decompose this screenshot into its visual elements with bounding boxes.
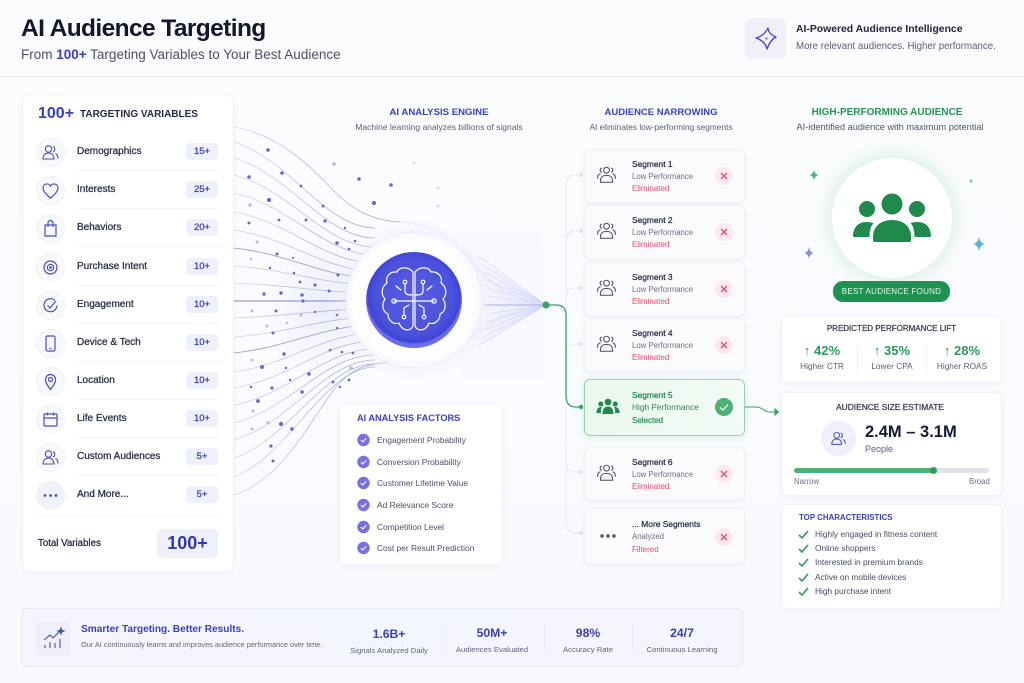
bottom summary bar [21,608,743,667]
factor: cost per result prediction [357,542,474,554]
row: and more: 5+ [197,489,207,500]
AI brain core [332,218,496,382]
stat: signals analyzed [350,627,428,655]
factor: conversion probability [357,456,461,468]
segment card: more segments: ... More Segments [632,519,700,529]
sparkles [804,170,984,259]
characteristic 5: High purchase intent [815,586,891,596]
row: purchase intent: Purchase Intent [77,261,147,272]
icon: people [821,421,856,456]
stat: higher CTR: Higher CTR [800,361,844,371]
segment card: more segments: Analyzed [632,532,664,541]
lift heading: PREDICTED PERFORMANCE LIFT [827,324,956,333]
characteristic 4: Active on mobile devices [815,572,906,582]
segment card 3 [584,262,745,316]
stat: audiences evaluated: 50M+ [477,626,507,640]
stat: lower CPA: ↑ 35% [874,343,910,358]
segment card 5: selected: High Performance [632,402,699,412]
segment card 4: Low Performance [632,341,693,350]
arrow: selected segment to results [745,407,778,415]
segment card 5: selected: Selected [632,416,663,425]
range labels: Narrow [794,477,819,486]
segment card 2: Low Performance [632,228,693,237]
panel heading [38,105,198,122]
row: interests: 25+ [194,184,210,195]
factor: ad relevance score [357,498,453,512]
factor: conversion probability: Conversion Probability [377,457,461,467]
characteristics heading: TOP CHARACTERISTICS [799,513,893,522]
factor: customer lifetime value: Customer Lifetime Value [377,478,468,488]
panel: audience size estimate: Broad [969,477,990,486]
panel heading: 100+ [38,105,74,122]
summary heading: Smarter Targeting. Better Results. [81,624,244,635]
stat: lower CPA [871,343,913,371]
segment card 1: Low Performance [632,172,693,181]
row: custom audiences: 5+ [197,451,207,462]
callout text: More relevant audiences. Higher performance. [796,41,996,52]
column heading: audience narrowing: AUDIENCE NARROWING [605,107,717,118]
size unit: People [865,444,893,454]
column heading: audience narrowing [590,107,732,132]
segment card 5: selected: Segment 5 [632,390,673,400]
segment card 6: Eliminated [632,482,669,491]
badge: best audience found [833,281,950,302]
row: and more: And More... [77,489,129,500]
stat: lower CPA: Lower CPA [871,361,913,371]
summary text: Our AI continuously learns and improves audience performance over time. [81,640,322,649]
total value: 100+ [167,533,208,553]
row: behaviors: 20+ [194,222,210,233]
row: location [23,362,234,400]
factor: engagement probability [357,434,466,446]
stat: signals analyzed: 1.6B+ [373,627,405,641]
factor: customer lifetime value [357,476,468,490]
factor: competition level [357,520,444,534]
row: custom audiences [23,438,234,476]
stat: higher ROAS: Higher ROAS [937,361,987,371]
characteristic 3: Interested in premium brands [815,557,923,567]
icon: brain [382,268,446,330]
factor: ad relevance score: Ad Relevance Score [377,500,453,510]
icon: sparkle badge [745,18,786,59]
row: purchase intent: 10+ [194,261,210,272]
stat: continuous learning: 24/7 [670,626,694,640]
panel heading: TARGETING VARIABLES [80,109,198,120]
factors heading: AI ANALYSIS FACTORS [357,413,460,423]
characteristic 2: Online shoppers [815,543,875,553]
stat: continuous learning [646,626,717,654]
header [0,0,1024,77]
characteristic 1: Highly engaged in fitness content [815,529,937,539]
factor: competition level: Competition Level [377,522,444,532]
title: AI Audience Targeting [21,15,266,42]
row: behaviors [23,209,234,247]
segment card 6: Low Performance [632,470,693,479]
icon: audience group [853,194,931,242]
total value [157,529,218,558]
segment card 4: Segment 4 [632,328,673,338]
panel: predicted performance lift [781,316,1002,383]
factor: cost per result prediction: Cost per Result Prediction [377,543,474,553]
segment card 3: Low Performance [632,285,693,294]
row: life events [23,400,234,438]
panel: targeting variables [22,94,234,572]
row: device and tech [23,324,234,362]
row: life events: Life Events [77,413,126,424]
segment card: more segments: Filtered [632,545,659,554]
column heading: high-performing audience: AI-identified audience with maximum potential [797,122,983,132]
column heading: AI analysis engine: AI ANALYSIS ENGINE [390,107,488,118]
stat: accuracy rate: Accuracy Rate [563,645,613,654]
range slider [794,468,989,473]
stat: higher ROAS [937,343,987,371]
row: demographics: 15+ [194,146,210,157]
column heading: AI analysis engine [355,107,523,132]
data particles [247,148,393,462]
row: location: 10+ [194,375,210,386]
icon: growth chart [36,621,70,655]
row: interests: Interests [77,184,115,195]
stat: continuous learning: Continuous Learning [647,645,717,654]
row: engagement [23,286,234,324]
segment card: more segments [584,508,745,564]
row: life events: 10+ [194,413,210,424]
segment card 6: Segment 6 [632,457,673,467]
stat: audiences evaluated [456,626,528,654]
segment card 1: Segment 1 [632,159,673,169]
callout heading: AI-Powered Audience Intelligence [796,24,962,35]
panel: top characteristics [781,504,1002,609]
stat: audiences evaluated: Audiences Evaluated [456,645,528,654]
row: engagement: 10+ [194,299,210,310]
segment card 5: selected [584,379,745,436]
stat: higher CTR: ↑ 42% [804,343,840,358]
badge: best audience found: BEST AUDIENCE FOUND [842,287,941,296]
column heading: audience narrowing: AI eliminates low-performing segments [590,122,732,132]
size value: 2.4M – 3.1M [865,423,957,441]
row: engagement: Engagement [77,299,134,310]
stat: accuracy rate [563,626,613,654]
stat: accuracy rate: 98% [576,626,600,640]
row: location: Location [77,375,115,386]
row: demographics [23,133,234,171]
column heading: high-performing audience [796,107,983,132]
stat: signals analyzed: Signals Analyzed Daily [350,646,428,655]
row: device and tech: 10+ [194,337,210,348]
segment card 6 [584,447,745,500]
segment card 4 [584,318,745,372]
column heading: high-performing audience: HIGH-PERFORMING AUDIENCE [812,107,962,118]
factor: engagement probability: Engagement Probability [377,435,466,445]
row: and more [23,476,234,514]
segment card 2 [584,205,745,259]
segment card 2: Segment 2 [632,215,673,225]
row: purchase intent [23,248,234,286]
stat: higher CTR [800,343,844,371]
stat: higher ROAS: ↑ 28% [944,343,980,358]
column heading: AI analysis engine: Machine learning analyzes billions of signals [355,122,523,132]
size heading: AUDIENCE SIZE ESTIMATE [836,402,944,412]
row: custom audiences: Custom Audiences [77,451,160,462]
segment card 1 [584,149,745,203]
segment card 1: Eliminated [632,184,669,193]
best audience circle [832,158,952,278]
segment card 3: Segment 3 [632,272,673,282]
panel: AI analysis factors [339,404,503,565]
panel: audience size estimate [781,392,1002,496]
segment card 2: Eliminated [632,240,669,249]
subtitle: From 100+ Targeting Variables to Your Best Audience [21,47,341,62]
signal lines [234,127,400,495]
row: interests [23,171,234,209]
segment card 4: Eliminated [632,353,669,362]
segment card 3: Eliminated [632,297,669,306]
row: behaviors: Behaviors [77,222,121,233]
row: device and tech: Device & Tech [77,337,141,348]
row: demographics: Demographics [77,146,141,157]
total label: Total Variables [38,538,101,549]
